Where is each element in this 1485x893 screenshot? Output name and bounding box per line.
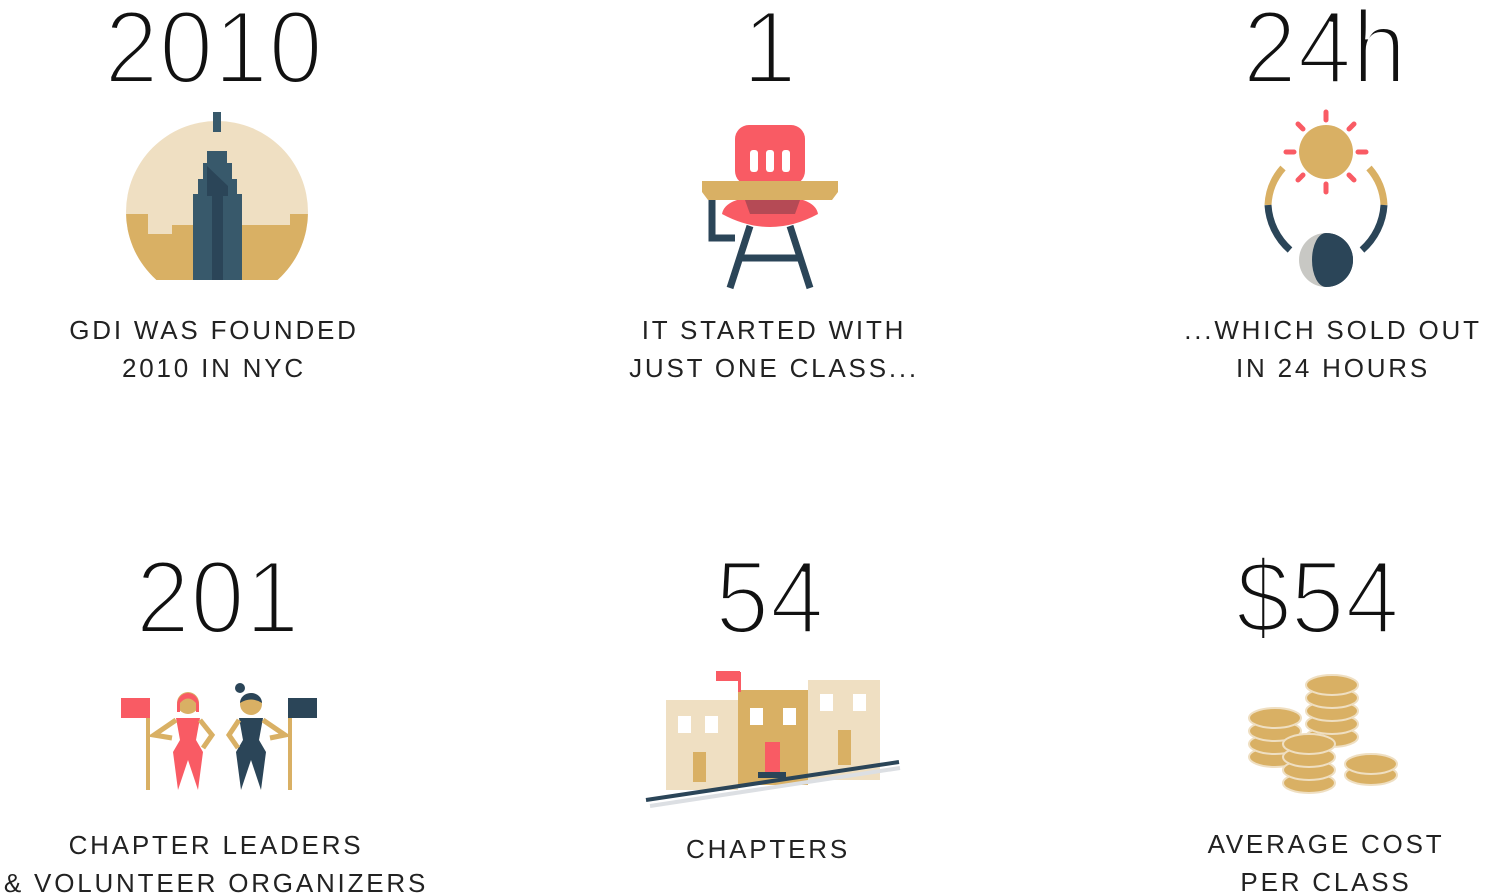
icon: sun and moon [1268,112,1384,287]
label: founded [69,315,359,383]
label: one class: IT STARTED WITH [642,315,906,345]
label: cost [1208,829,1444,893]
icon: two leaders with flags [121,683,317,790]
label: sold out [1184,315,1482,383]
label: leaders [4,830,428,893]
label: cost: AVERAGE COST [1208,829,1444,859]
icon: coin stacks [1249,675,1397,793]
number: 54: 54 [715,540,825,656]
icon: school chair [702,125,838,288]
icon: school buildings [646,671,900,806]
label: chapters: CHAPTERS [686,834,850,864]
number: 201: 201 [136,540,300,656]
label: sold out: ...WHICH SOLD OUT [1184,315,1482,345]
label: founded: 2010 IN NYC [122,353,306,383]
label: leaders: CHAPTER LEADERS [69,830,363,860]
label: sold out: IN 24 HOURS [1236,353,1430,383]
label: one class: JUST ONE CLASS... [629,353,919,383]
number: $54: $54 [1236,540,1400,656]
label: one class [629,315,919,383]
icon: empire state building [120,112,320,280]
icons [121,110,1398,808]
label: founded: GDI WAS FOUNDED [69,315,359,345]
